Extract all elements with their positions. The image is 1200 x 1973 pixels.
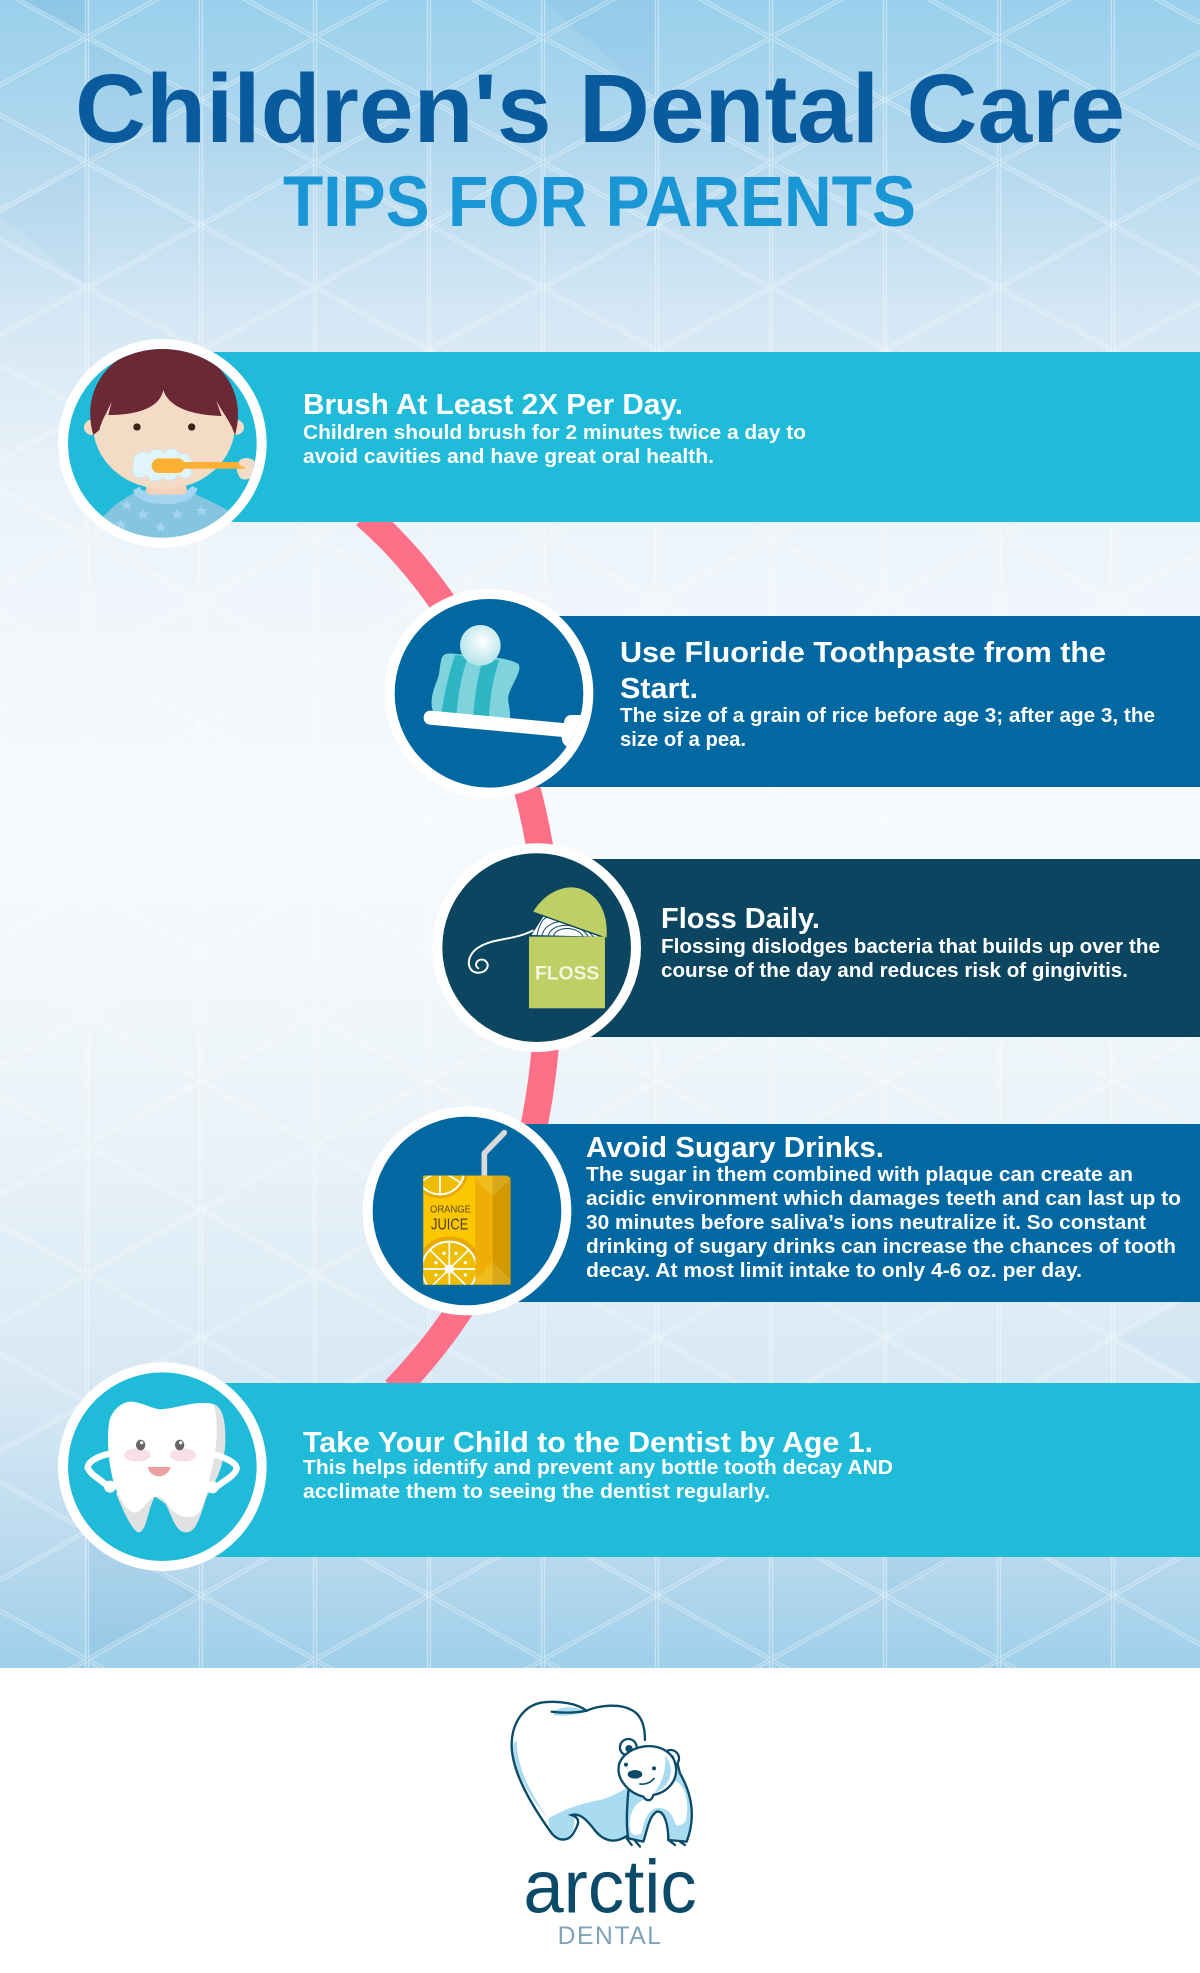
banner 4 <box>467 1124 1200 1302</box>
connector arc <box>365 515 549 1390</box>
icon: floss box: FLOSS <box>535 963 599 984</box>
heading 2 <box>620 637 1106 705</box>
logo wordmark: arctic <box>523 1845 697 1929</box>
icon: tooth and polar bear <box>512 1702 692 1847</box>
body 1: avoid cavities and have great oral health. <box>303 445 714 468</box>
icon: juice box <box>368 1112 566 1310</box>
body 2 <box>620 704 1155 751</box>
logo subtitle: DENTAL <box>558 1923 661 1950</box>
body 2: size of a pea. <box>620 728 746 751</box>
banner 2 <box>489 616 1200 787</box>
body 5: This helps identify and prevent any bottle tooth decay AND <box>303 1456 893 1479</box>
body 4: drinking of sugary drinks can increase the chances of tooth <box>586 1235 1176 1258</box>
title: Children's Dental Care <box>75 54 1125 163</box>
body 4: The sugar in them combined with plaque can create an <box>586 1163 1133 1186</box>
icon: toothbrush with paste <box>390 594 588 793</box>
heading 1: Brush At Least 2X Per Day. <box>303 389 683 421</box>
panel: tip 5 dentist by age 1 <box>63 1367 1200 1566</box>
body 3: Flossing dislodges bacteria that builds up over the <box>661 935 1160 958</box>
body 1: Children should brush for 2 minutes twice a day to <box>303 421 806 444</box>
body 5: acclimate them to seeing the dentist regularly. <box>303 1480 770 1503</box>
subtitle: TIPS FOR PARENTS <box>283 163 916 242</box>
body 5 <box>303 1456 893 1503</box>
banner 5 <box>162 1383 1200 1557</box>
body 1 <box>303 421 806 468</box>
heading 2: Use Fluoride Toothpaste from the <box>620 637 1106 669</box>
panel: tip 3 floss daily <box>437 848 1200 1047</box>
heading 3: Floss Daily. <box>661 903 820 935</box>
icon: floss box <box>437 848 636 1047</box>
icon: juice box: JUICE <box>431 1216 468 1233</box>
heading 2: Start. <box>620 673 698 705</box>
body 3 <box>661 935 1160 982</box>
banner 1 <box>162 352 1200 522</box>
body 2: The size of a grain of rice before age 3; after age 3, the <box>620 704 1155 727</box>
body 3: course of the day and reduces risk of gingivitis. <box>661 959 1128 982</box>
body 4: acidic environment which damages teeth and can last up to <box>586 1187 1181 1210</box>
heading 5: Take Your Child to the Dentist by Age 1. <box>303 1427 873 1459</box>
body 4 <box>586 1163 1181 1282</box>
body 4: 30 minutes before saliva’s ions neutralize it. So constant <box>586 1211 1146 1234</box>
panel: tip 4 sugary drinks <box>368 1112 1200 1310</box>
heading 4: Avoid Sugary Drinks. <box>586 1132 884 1164</box>
banner 3 <box>537 859 1200 1037</box>
panel: tip 2 fluoride toothpaste <box>390 594 1200 793</box>
panel: tip 1 brush twice a day <box>63 344 1200 553</box>
icon: smiling tooth <box>63 1367 262 1566</box>
footer logo: arctic dental <box>512 1702 697 1950</box>
icon: juice box: ORANGE <box>430 1204 471 1215</box>
body 4: decay. At most limit intake to only 4-6 oz. per day. <box>586 1259 1082 1282</box>
icon: boy brushing teeth <box>63 344 262 553</box>
